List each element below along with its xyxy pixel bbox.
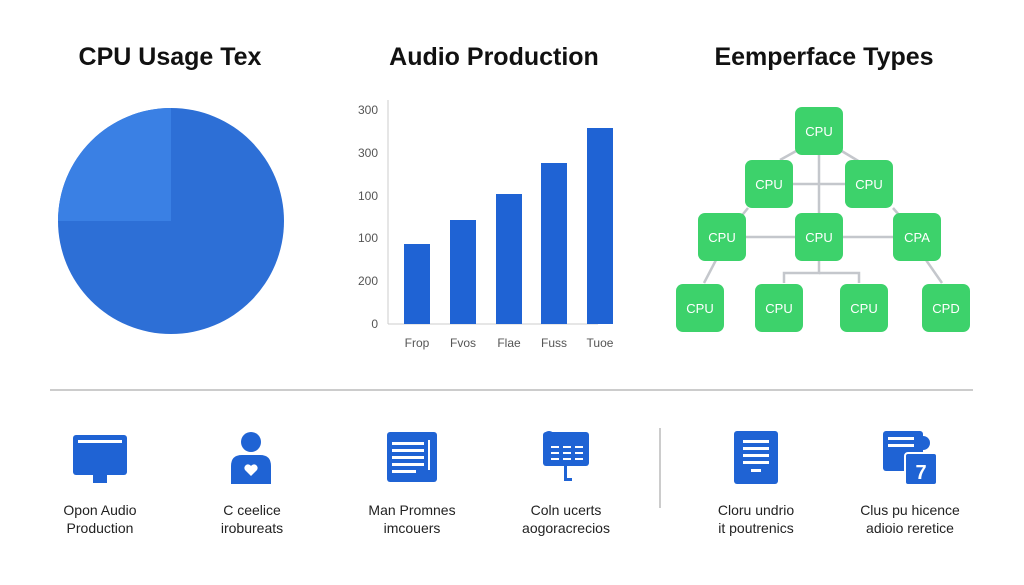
caption 4 (522, 502, 610, 536)
caption 5 (718, 502, 794, 536)
tree diagram: CPU (686, 301, 714, 316)
tree diagram: CPU (855, 177, 883, 192)
tree diagram: CPU (755, 177, 783, 192)
bar chart: 200 (358, 274, 378, 288)
tree diagram: CPU (708, 230, 736, 245)
bar chart: Flae (497, 336, 521, 350)
icon: monitor (73, 435, 127, 483)
bar chart: Fuss (541, 336, 567, 350)
caption 3: imcouers (384, 520, 440, 536)
caption 4: Coln ucerts (531, 502, 601, 518)
caption 3 (368, 502, 456, 536)
bar chart: Tuoe (587, 336, 614, 350)
bar chart: Fvos (450, 336, 476, 350)
icon: list (734, 431, 778, 484)
icon: person heart (231, 432, 271, 484)
caption 2 (221, 502, 283, 536)
bar chart: 0 (371, 317, 378, 331)
bar chart: 100 (358, 189, 378, 203)
bar chart: 100 (358, 231, 378, 245)
caption 1: Production (67, 520, 133, 536)
icon: calendar 7 (883, 431, 937, 485)
tree diagram: CPU (805, 124, 833, 139)
bar chart: 300 (358, 146, 378, 160)
title: Eemperface Types: Eemperface Types (714, 43, 934, 71)
caption 6 (860, 502, 960, 536)
caption 1: Opon Audio (63, 502, 137, 518)
caption 2: C ceelice (223, 502, 281, 518)
caption 2: irobureats (221, 520, 283, 536)
caption 4: aogoracrecios (522, 520, 610, 536)
caption 6: adioio reretice (866, 520, 954, 536)
bar chart: 300 (358, 103, 378, 117)
tree diagram: CPD (932, 301, 960, 316)
icon: board (543, 431, 589, 481)
tree diagram: CPU (850, 301, 878, 316)
icon: calendar 7: 7 (915, 462, 927, 484)
title: Audio Production: Audio Production (389, 43, 599, 71)
caption 5: it poutrenics (718, 520, 794, 536)
caption 6: Clus pu hicence (860, 502, 960, 518)
caption 5: Cloru undrio (718, 502, 794, 518)
title: CPU Usage Tex: CPU Usage Tex (79, 43, 261, 71)
caption 1 (63, 502, 137, 536)
tree diagram: CPU (765, 301, 793, 316)
icon: document (387, 432, 437, 482)
tree diagram: CPA (904, 230, 930, 245)
tree diagram: CPU (805, 230, 833, 245)
bar chart: Frop (405, 336, 430, 350)
caption 3: Man Promnes (368, 502, 456, 518)
